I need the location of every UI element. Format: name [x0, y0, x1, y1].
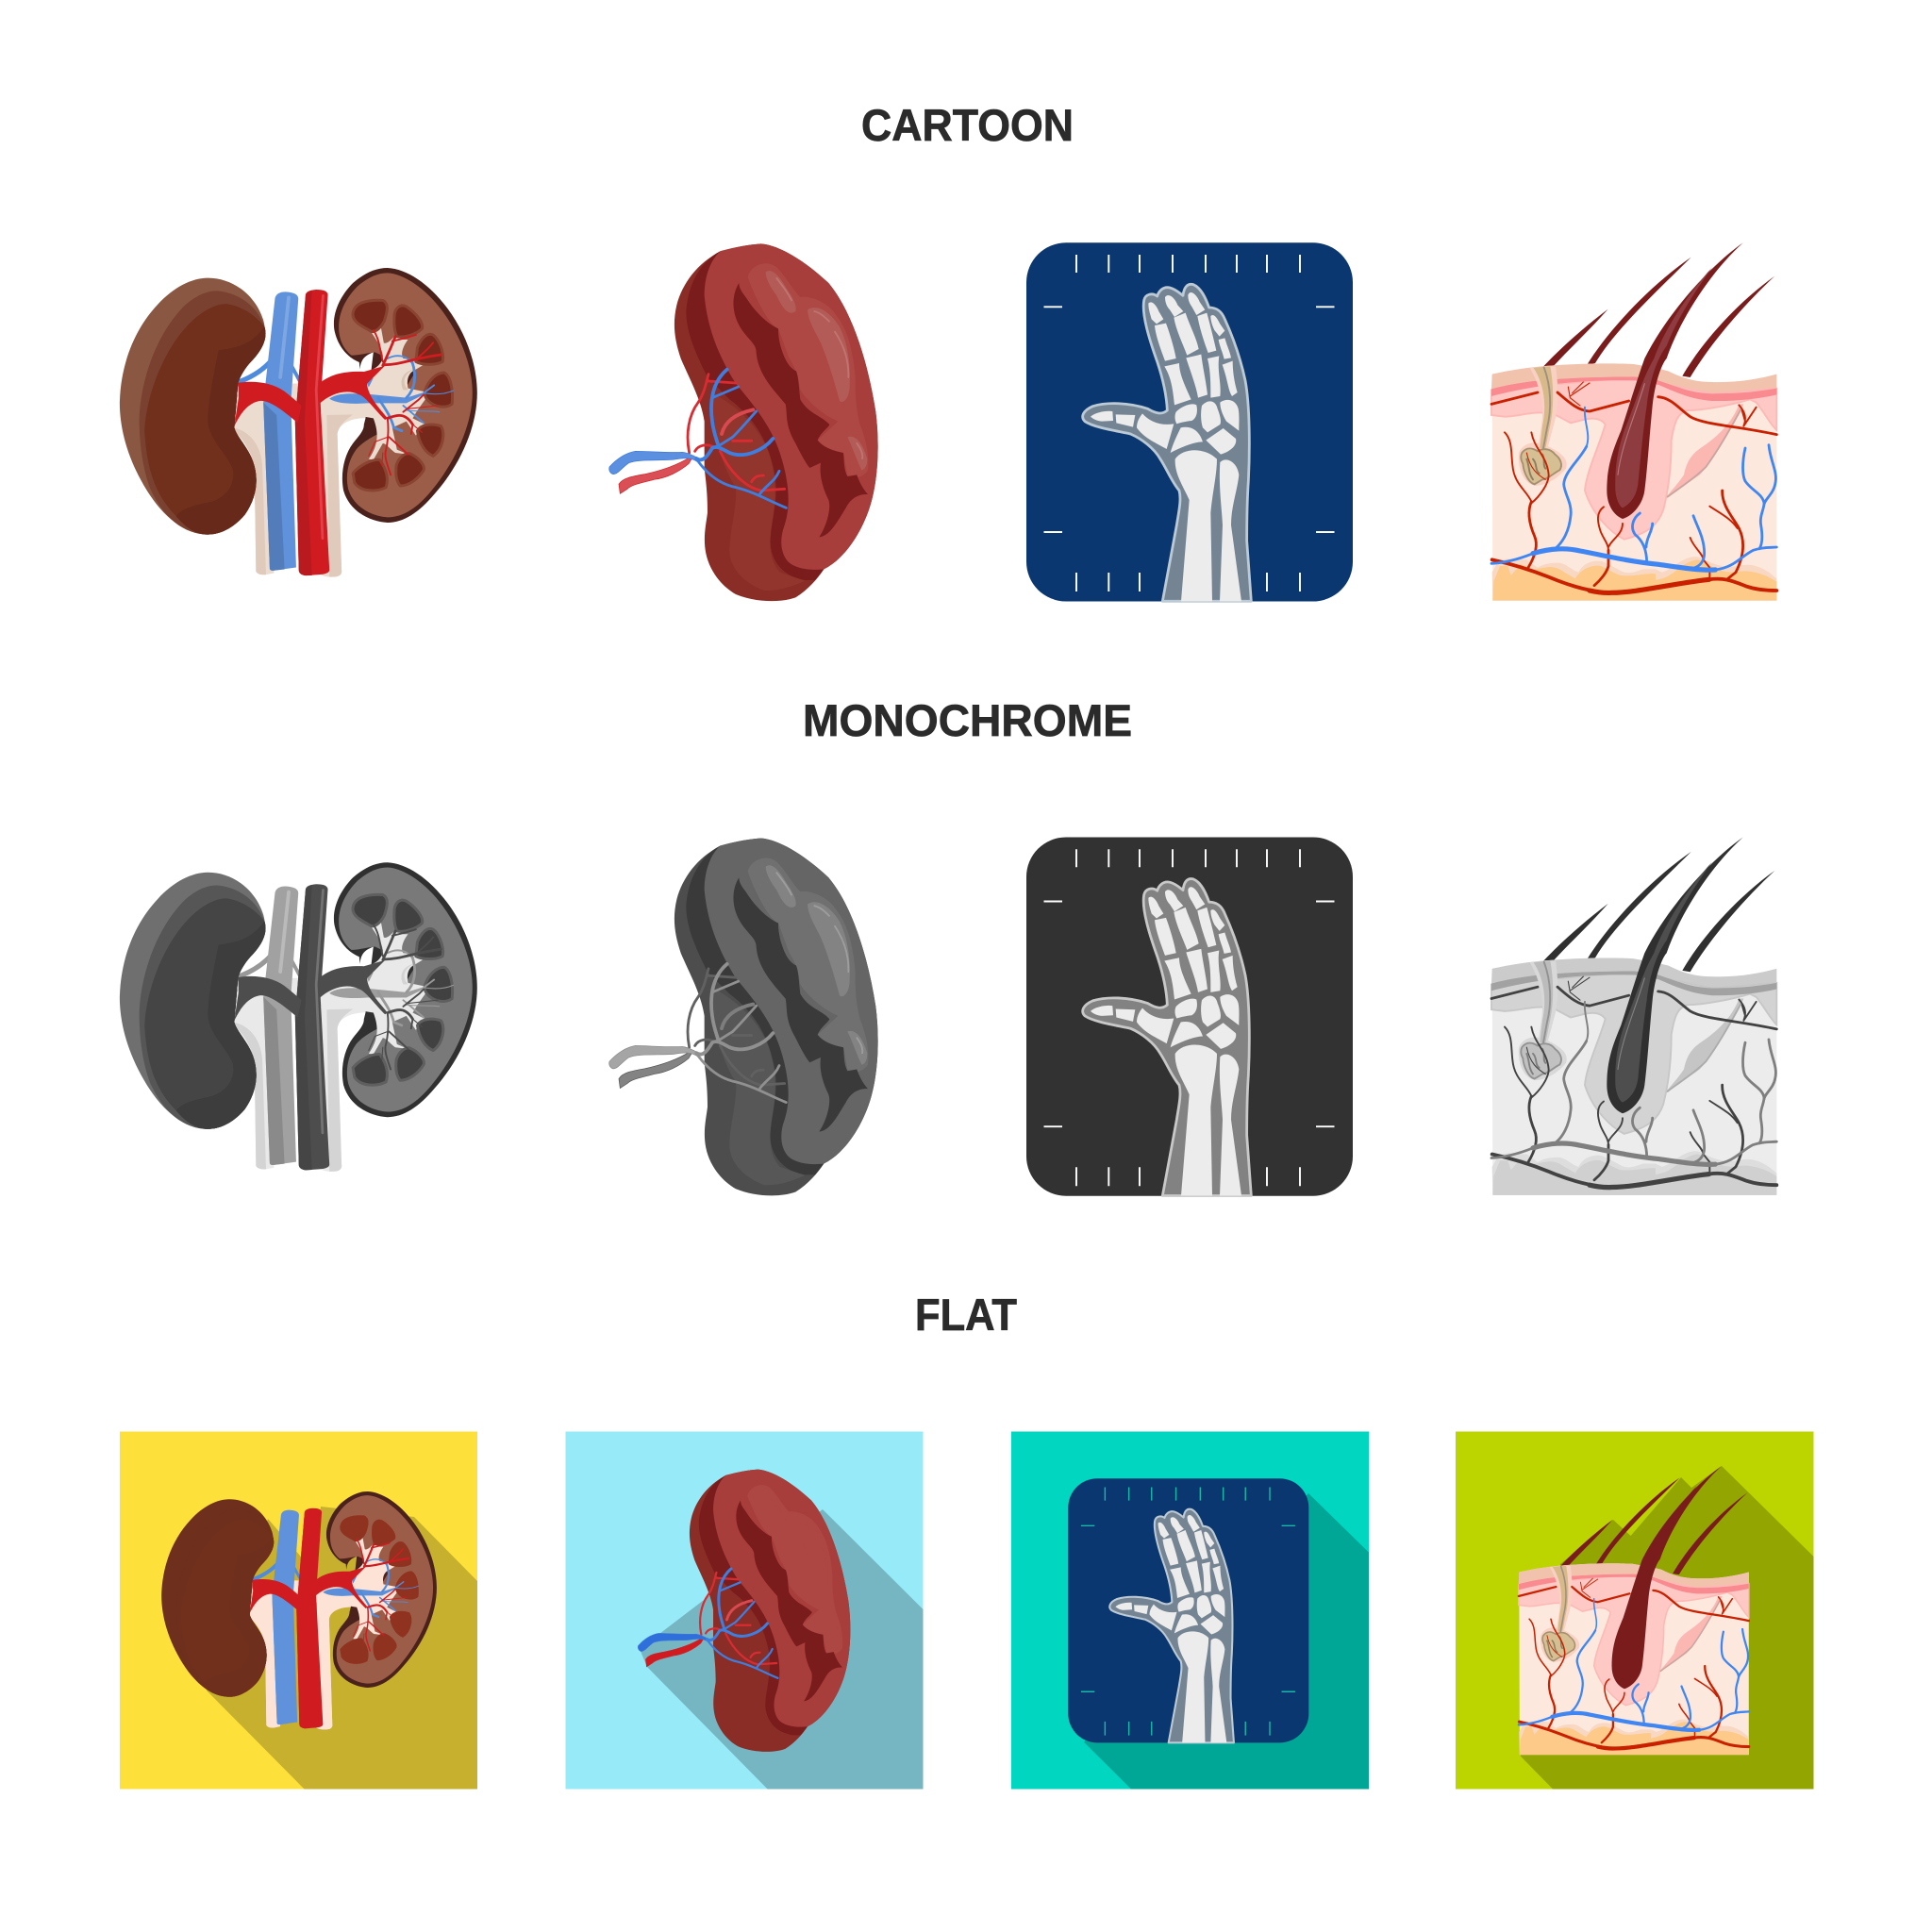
heading: flat: FLAT	[915, 1290, 1017, 1340]
renal pelvis	[362, 325, 425, 459]
long shadow	[1521, 1466, 1813, 1789]
thin hairs	[1542, 258, 1774, 377]
panel background	[120, 1432, 477, 1789]
kidney pyramids	[353, 300, 453, 491]
hand skeleton	[1083, 284, 1251, 601]
sebaceous gland	[1519, 366, 1567, 486]
icon: skin and hair, cartoon	[1491, 242, 1776, 601]
hand silhouette	[1083, 284, 1251, 601]
icon: kidneys, flat	[161, 1491, 437, 1729]
icon: hand x-ray, cartoon	[1026, 242, 1353, 602]
panel: flat kidneys	[120, 1432, 477, 1789]
left kidney	[120, 278, 266, 535]
panel background	[566, 1432, 923, 1789]
heading: monochrome: MONOCHROME	[803, 695, 1132, 745]
pink basal line	[1491, 376, 1776, 401]
panel: flat spleen	[566, 1432, 923, 1789]
spleen vessels	[609, 370, 786, 508]
fat layer	[1492, 557, 1776, 601]
panel background	[1456, 1432, 1813, 1789]
long shadow	[1084, 1493, 1369, 1789]
long shadow	[640, 1509, 923, 1789]
icon: spleen, monochrome	[609, 839, 878, 1195]
main hair	[1607, 242, 1743, 519]
erector muscle	[1665, 404, 1743, 498]
heading: cartoon: CARTOON	[861, 100, 1074, 150]
vena cava	[263, 291, 298, 571]
dermis	[1492, 363, 1776, 601]
ureter tubes	[233, 383, 372, 577]
inner dark band	[733, 283, 868, 537]
red vessels	[1491, 382, 1776, 592]
spleen back lobe	[675, 243, 878, 601]
epidermis	[1491, 363, 1776, 393]
blue vessels	[1491, 408, 1776, 570]
icon: skin and hair, flat	[1519, 1466, 1749, 1755]
spleen dark fold	[686, 251, 824, 580]
hand bones	[1091, 292, 1241, 601]
aorta and left renal artery	[234, 290, 329, 575]
icon: kidneys, monochrome	[120, 862, 477, 1172]
x-ray film	[1026, 242, 1353, 602]
left renal vein	[239, 354, 299, 382]
icon: hand x-ray, flat	[1068, 1478, 1308, 1742]
panel: flat hand x-ray	[1011, 1432, 1369, 1789]
icon: hand x-ray, monochrome	[1026, 838, 1353, 1196]
spleen lobe highlights	[748, 263, 868, 477]
spleen front lobe	[705, 243, 878, 570]
icon: spleen, cartoon	[609, 243, 878, 601]
film tick marks	[1043, 255, 1334, 591]
spleen lower lobe shade	[712, 393, 805, 591]
panel: flat skin and hair	[1456, 1432, 1813, 1789]
icon: spleen, flat	[638, 1470, 850, 1752]
icon: skin and hair, monochrome	[1491, 838, 1776, 1195]
right kidney cross-section	[334, 268, 477, 523]
icon: kidneys, cartoon	[120, 268, 477, 577]
long shadow	[207, 1507, 477, 1789]
follicle and papillary dermis	[1491, 377, 1776, 540]
panel background	[1011, 1432, 1369, 1789]
right renal vessels tree	[319, 330, 454, 475]
